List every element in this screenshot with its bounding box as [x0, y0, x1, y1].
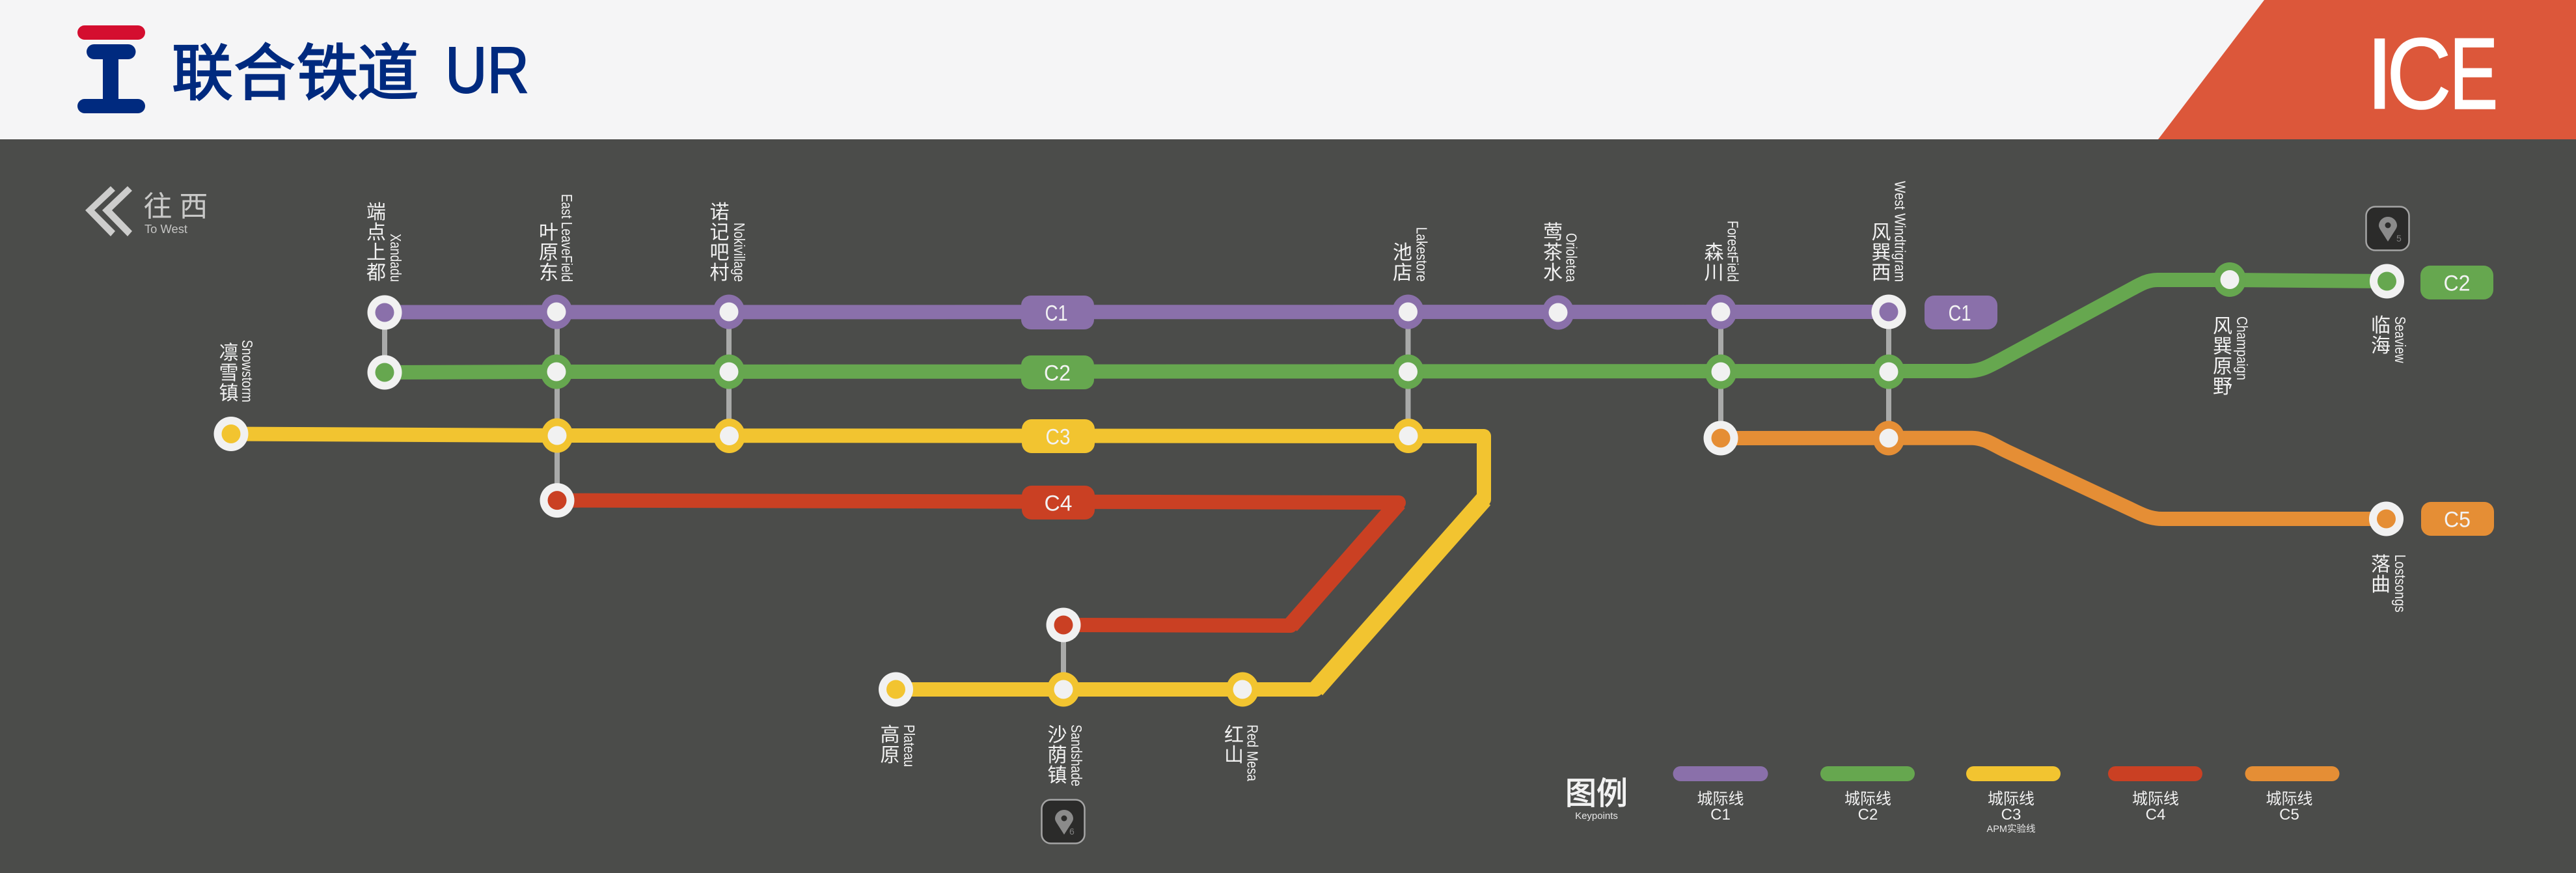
label: 临海 Seaview — [2371, 315, 2409, 363]
legend item C5: C5 — [2279, 806, 2299, 824]
label: 沙荫镇 Sandshade: 沙荫镇 — [1048, 725, 1067, 786]
legend item C4 — [2108, 766, 2202, 824]
legend item C3: 城际线 — [1988, 790, 2035, 808]
label: 风巽原野 Champaign — [2213, 316, 2251, 398]
label: 叶原东 East LeaveField: East LeaveField — [558, 194, 575, 282]
badge C3: C3 — [1045, 424, 1070, 449]
legend item C3: APM实验线 — [1987, 824, 2035, 835]
badge C5 terminal: C5 — [2444, 508, 2471, 533]
legend item C2: C2 — [1858, 806, 1878, 824]
label: 端点上都 Xandadu — [366, 202, 404, 284]
C5 stations — [1704, 421, 2404, 536]
legend title: Keypoints — [1575, 811, 1618, 822]
badge C4: C4 — [1044, 491, 1073, 516]
label: 凛雪镇 Snowstorm: Snowstorm — [239, 340, 256, 402]
icon: map pin 6: 6 — [1069, 826, 1075, 837]
legend item C3: C3 — [2001, 806, 2021, 824]
badge C2 — [1021, 355, 1094, 389]
label: 叶原东 East LeaveField — [539, 194, 575, 284]
badge C1: C1 — [1045, 301, 1068, 326]
legend — [1565, 766, 2339, 835]
label: 凛雪镇 Snowstorm — [219, 340, 256, 404]
label: 池店 Lakestore: Lakestore — [1414, 227, 1431, 282]
badge C5 terminal — [2421, 502, 2494, 536]
C1 stations — [367, 294, 1906, 329]
label: 端点上都 Xandadu: Xandadu — [387, 234, 404, 282]
label: 临海 Seaview: Seaview — [2392, 316, 2409, 363]
icon: map pin 5: 5 — [2396, 233, 2402, 243]
icon: UR rail logo — [77, 25, 145, 113]
line C5 — [1721, 438, 2386, 519]
service badge: ICE: C — [2387, 18, 2452, 130]
label: 端点上都 Xandadu: 端点上都 — [366, 202, 386, 284]
legend item C4: 城际线 — [2132, 790, 2179, 808]
line C3 — [231, 434, 1484, 689]
badge C3 — [1022, 419, 1095, 453]
icon: map pin 6 — [1041, 799, 1084, 844]
badge C2 terminal — [2420, 266, 2493, 299]
legend item C4: C4 — [2146, 806, 2165, 824]
label: 红山 Red Mesa: 红山 — [1224, 725, 1244, 766]
label: 落曲 Lostsongs — [2371, 554, 2409, 613]
line C2 — [385, 280, 2387, 372]
label: 风巽西 West Windtrigram: 风巽西 — [1872, 222, 1891, 284]
C3 stations — [213, 417, 1424, 707]
label: 凛雪镇 Snowstorm: 凛雪镇 — [219, 342, 238, 404]
service badge: ICE: E — [2450, 17, 2498, 130]
label: 莺茶水 Orioletea: Orioletea — [1563, 233, 1580, 282]
label: 风巽原野 Champaign: Champaign — [2234, 316, 2251, 380]
station labels — [219, 181, 2409, 786]
legend item C2 — [1820, 766, 1915, 824]
label: 风巽原野 Champaign: 风巽原野 — [2213, 316, 2232, 398]
label: 沙荫镇 Sandshade: Sandshade — [1068, 725, 1085, 786]
badge C1 terminal: C1 — [1949, 301, 1971, 326]
label: 诺记吧村 Nokivillage: 诺记吧村 — [709, 202, 729, 284]
label: 落曲 Lostsongs: Lostsongs — [2392, 555, 2409, 613]
label: 落曲 Lostsongs: 落曲 — [2371, 554, 2391, 596]
label: 红山 Red Mesa — [1224, 725, 1261, 781]
line C1 — [385, 305, 1889, 319]
header band — [0, 0, 2576, 139]
badge C2 terminal: C2 — [2443, 271, 2471, 296]
station markers — [213, 262, 2404, 707]
label: 森川 ForestField: 森川 — [1704, 242, 1723, 284]
legend item C5: 城际线 — [2266, 790, 2313, 808]
label: 风巽西 West Windtrigram — [1872, 181, 1908, 284]
label: 莺茶水 Orioletea: 莺茶水 — [1543, 222, 1563, 284]
title: 联合铁道 UR: 联合铁道 — [172, 39, 418, 107]
label: 沙荫镇 Sandshade — [1048, 725, 1085, 786]
badge C1 — [1021, 296, 1094, 329]
C4 stations — [540, 483, 1080, 642]
legend title: 图例 — [1565, 777, 1628, 811]
label: 高原 Plateau: 高原 — [880, 725, 899, 766]
label: 池店 Lakestore: 池店 — [1393, 242, 1412, 284]
icon: map pin 5 — [2366, 207, 2409, 250]
badge C2: C2 — [1044, 361, 1071, 385]
label: 莺茶水 Orioletea — [1543, 222, 1580, 284]
label: 红山 Red Mesa: Red Mesa — [1244, 725, 1261, 781]
legend item C1 — [1673, 766, 1768, 824]
title: 联合铁道 UR: UR — [445, 34, 529, 107]
label: 诺记吧村 Nokivillage: Nokivillage — [731, 223, 748, 282]
C2 stations — [367, 262, 2404, 389]
direction indicator: to west: To West — [144, 222, 187, 236]
label: 叶原东 East LeaveField: 叶原东 — [539, 222, 558, 284]
label: 风巽西 West Windtrigram: West Windtrigram — [1891, 181, 1908, 282]
label: 诺记吧村 Nokivillage — [709, 202, 748, 284]
direction indicator: to west — [85, 186, 208, 236]
legend item C3 — [1966, 766, 2061, 835]
legend item C1: C1 — [1710, 806, 1731, 824]
line C4 — [557, 501, 1399, 626]
direction indicator: to west: 往西 — [143, 191, 208, 223]
legend item C1: 城际线 — [1697, 790, 1744, 808]
legend item C5 — [2245, 766, 2339, 824]
line badges on route — [1021, 266, 2494, 536]
label: 临海 Seaview: 临海 — [2371, 315, 2391, 357]
service badge: ICE: I — [2366, 17, 2394, 130]
badge C4 — [1022, 486, 1095, 520]
service badge: ICE — [2158, 0, 2576, 139]
label: 森川 ForestField — [1704, 221, 1742, 284]
label: 池店 Lakestore — [1393, 227, 1431, 284]
label: 高原 Plateau — [880, 725, 918, 767]
badge C1 terminal — [1925, 296, 1997, 329]
label: 森川 ForestField: ForestField — [1725, 221, 1742, 282]
label: 高原 Plateau: Plateau — [901, 725, 918, 767]
legend item C2: 城际线 — [1844, 790, 1891, 808]
title: 联合铁道 UR — [172, 34, 529, 107]
interchange connectors — [385, 312, 1889, 689]
